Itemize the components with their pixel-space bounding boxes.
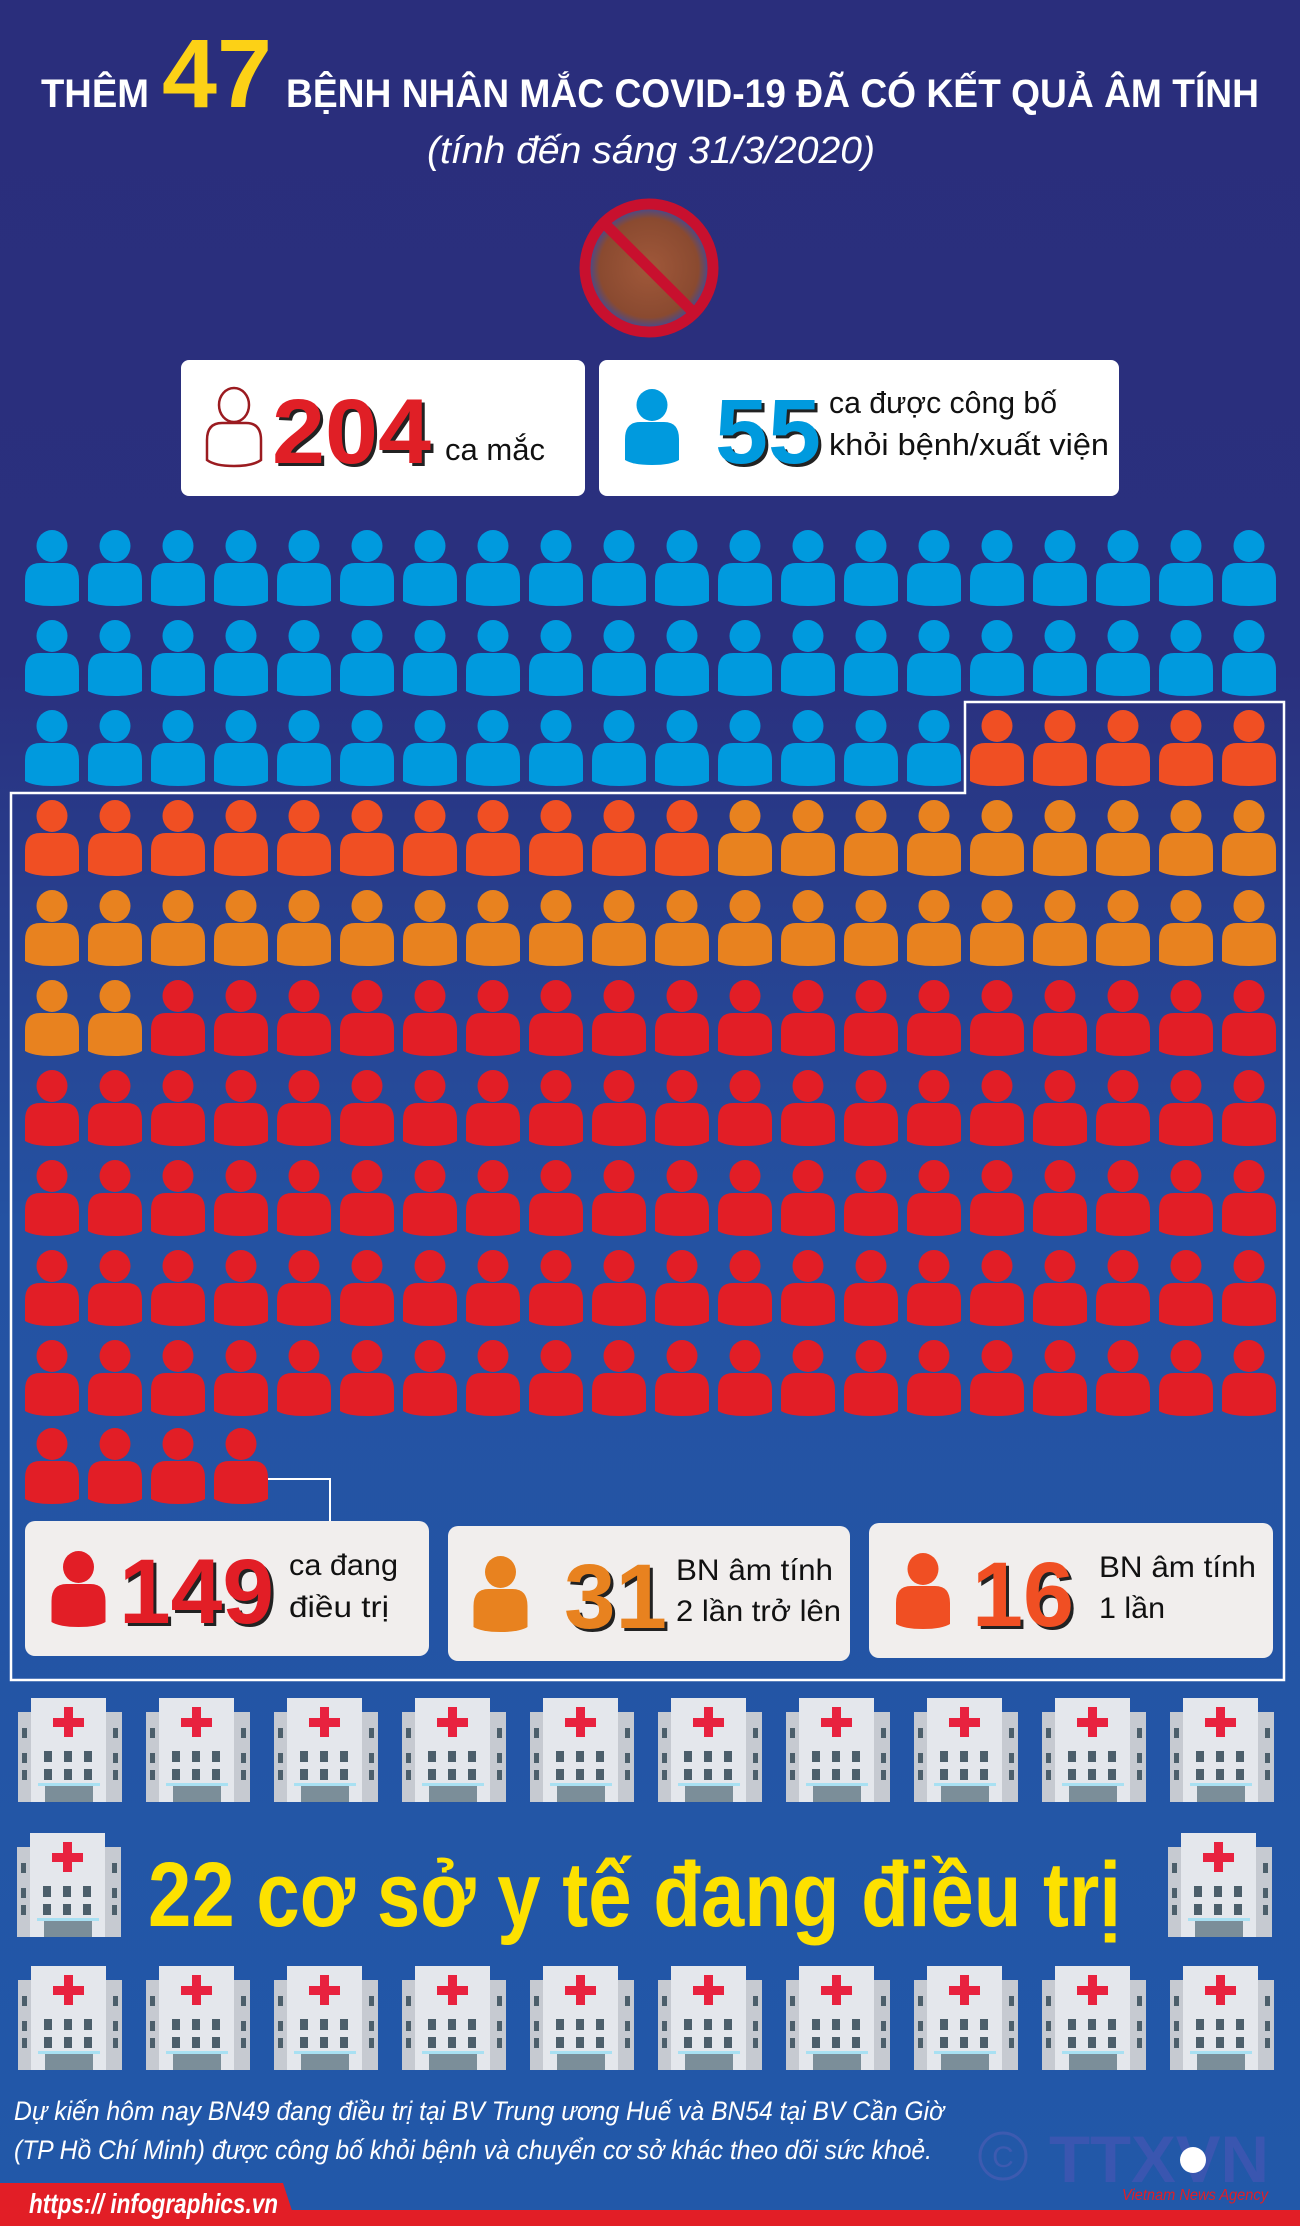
- number 31: 31: [564, 1546, 667, 1648]
- label: ca mắc: [445, 432, 545, 467]
- number 204: 204: [272, 381, 431, 483]
- number 16: 16: [975, 1547, 1077, 1649]
- icon: red person: [52, 1551, 106, 1627]
- icon: orange-red person: [896, 1553, 950, 1629]
- label: [1099, 1551, 1256, 1625]
- connector line: [267, 1479, 330, 1521]
- number 204: 204: [275, 384, 434, 486]
- footnote text: (TP Hồ Chí Minh) được công bố khỏi bệnh và chuyển cơ sở khác theo dõi sức khoẻ.: [14, 2135, 932, 2165]
- icon: outline person: [207, 388, 261, 466]
- number 55: 55: [718, 384, 824, 486]
- hospitals row 1: [18, 1698, 1274, 1802]
- panel: 55 recovered: [599, 360, 1119, 496]
- heading: 22 facilities: 22 cơ sở y tế đang điều trị: [148, 1844, 1121, 1946]
- footnote text: Dự kiến hôm nay BN49 đang điều trị tại BV Trung ương Huế và BN54 tại BV Cần Giờ: [14, 2096, 946, 2126]
- footer bar: [0, 2183, 1300, 2226]
- label: [676, 1554, 841, 1628]
- title: [41, 19, 1259, 128]
- number 149: 149: [119, 1541, 274, 1643]
- label: 1 lần: [1099, 1592, 1165, 1625]
- label: BN âm tính: [1099, 1551, 1256, 1584]
- panel: 149 in treatment: [25, 1521, 429, 1656]
- panel: 16 negative once: [869, 1523, 1273, 1658]
- panel: 31 negative 2+: [448, 1526, 850, 1661]
- label: ca đang: [289, 1549, 398, 1582]
- label: khỏi bệnh/xuất viện: [829, 427, 1109, 462]
- label: [829, 385, 1109, 462]
- label: 2 lần trở lên: [676, 1595, 841, 1628]
- label: BN âm tính: [676, 1554, 833, 1587]
- label: ca được công bố: [829, 385, 1057, 420]
- logo: TTXVN: C: [992, 2141, 1014, 2174]
- person grid: 204 cases: [25, 530, 1276, 1504]
- hospitals row 3: [18, 1966, 1274, 2070]
- panel: 204 cases: [181, 360, 585, 496]
- label: [289, 1549, 398, 1624]
- logo: TTXVN: TTXVN: [1049, 2122, 1269, 2196]
- number 55: 55: [715, 381, 821, 483]
- icon: person blue: [625, 389, 679, 465]
- number 16: 16: [972, 1544, 1074, 1646]
- outline box around active cases: [11, 702, 1284, 1680]
- label: điều trị: [289, 1591, 389, 1624]
- subtitle: (tính đến sáng 31/3/2020): [427, 130, 875, 172]
- title: 47: [162, 19, 272, 128]
- number 31: 31: [567, 1549, 670, 1651]
- footnote text: [14, 2096, 946, 2165]
- icon: orange person: [474, 1556, 528, 1632]
- logo: TTXVN: Vietnam News Agency: [1122, 2187, 1269, 2204]
- number 149: 149: [122, 1544, 277, 1646]
- title: THÊM: [41, 70, 149, 116]
- logo: TTXVN: [980, 2122, 1269, 2204]
- footer bar: https:// infographics.vn: [29, 2188, 278, 2219]
- icon: virus forbidden: [585, 204, 713, 332]
- hospitals middle row: [17, 1833, 1272, 1937]
